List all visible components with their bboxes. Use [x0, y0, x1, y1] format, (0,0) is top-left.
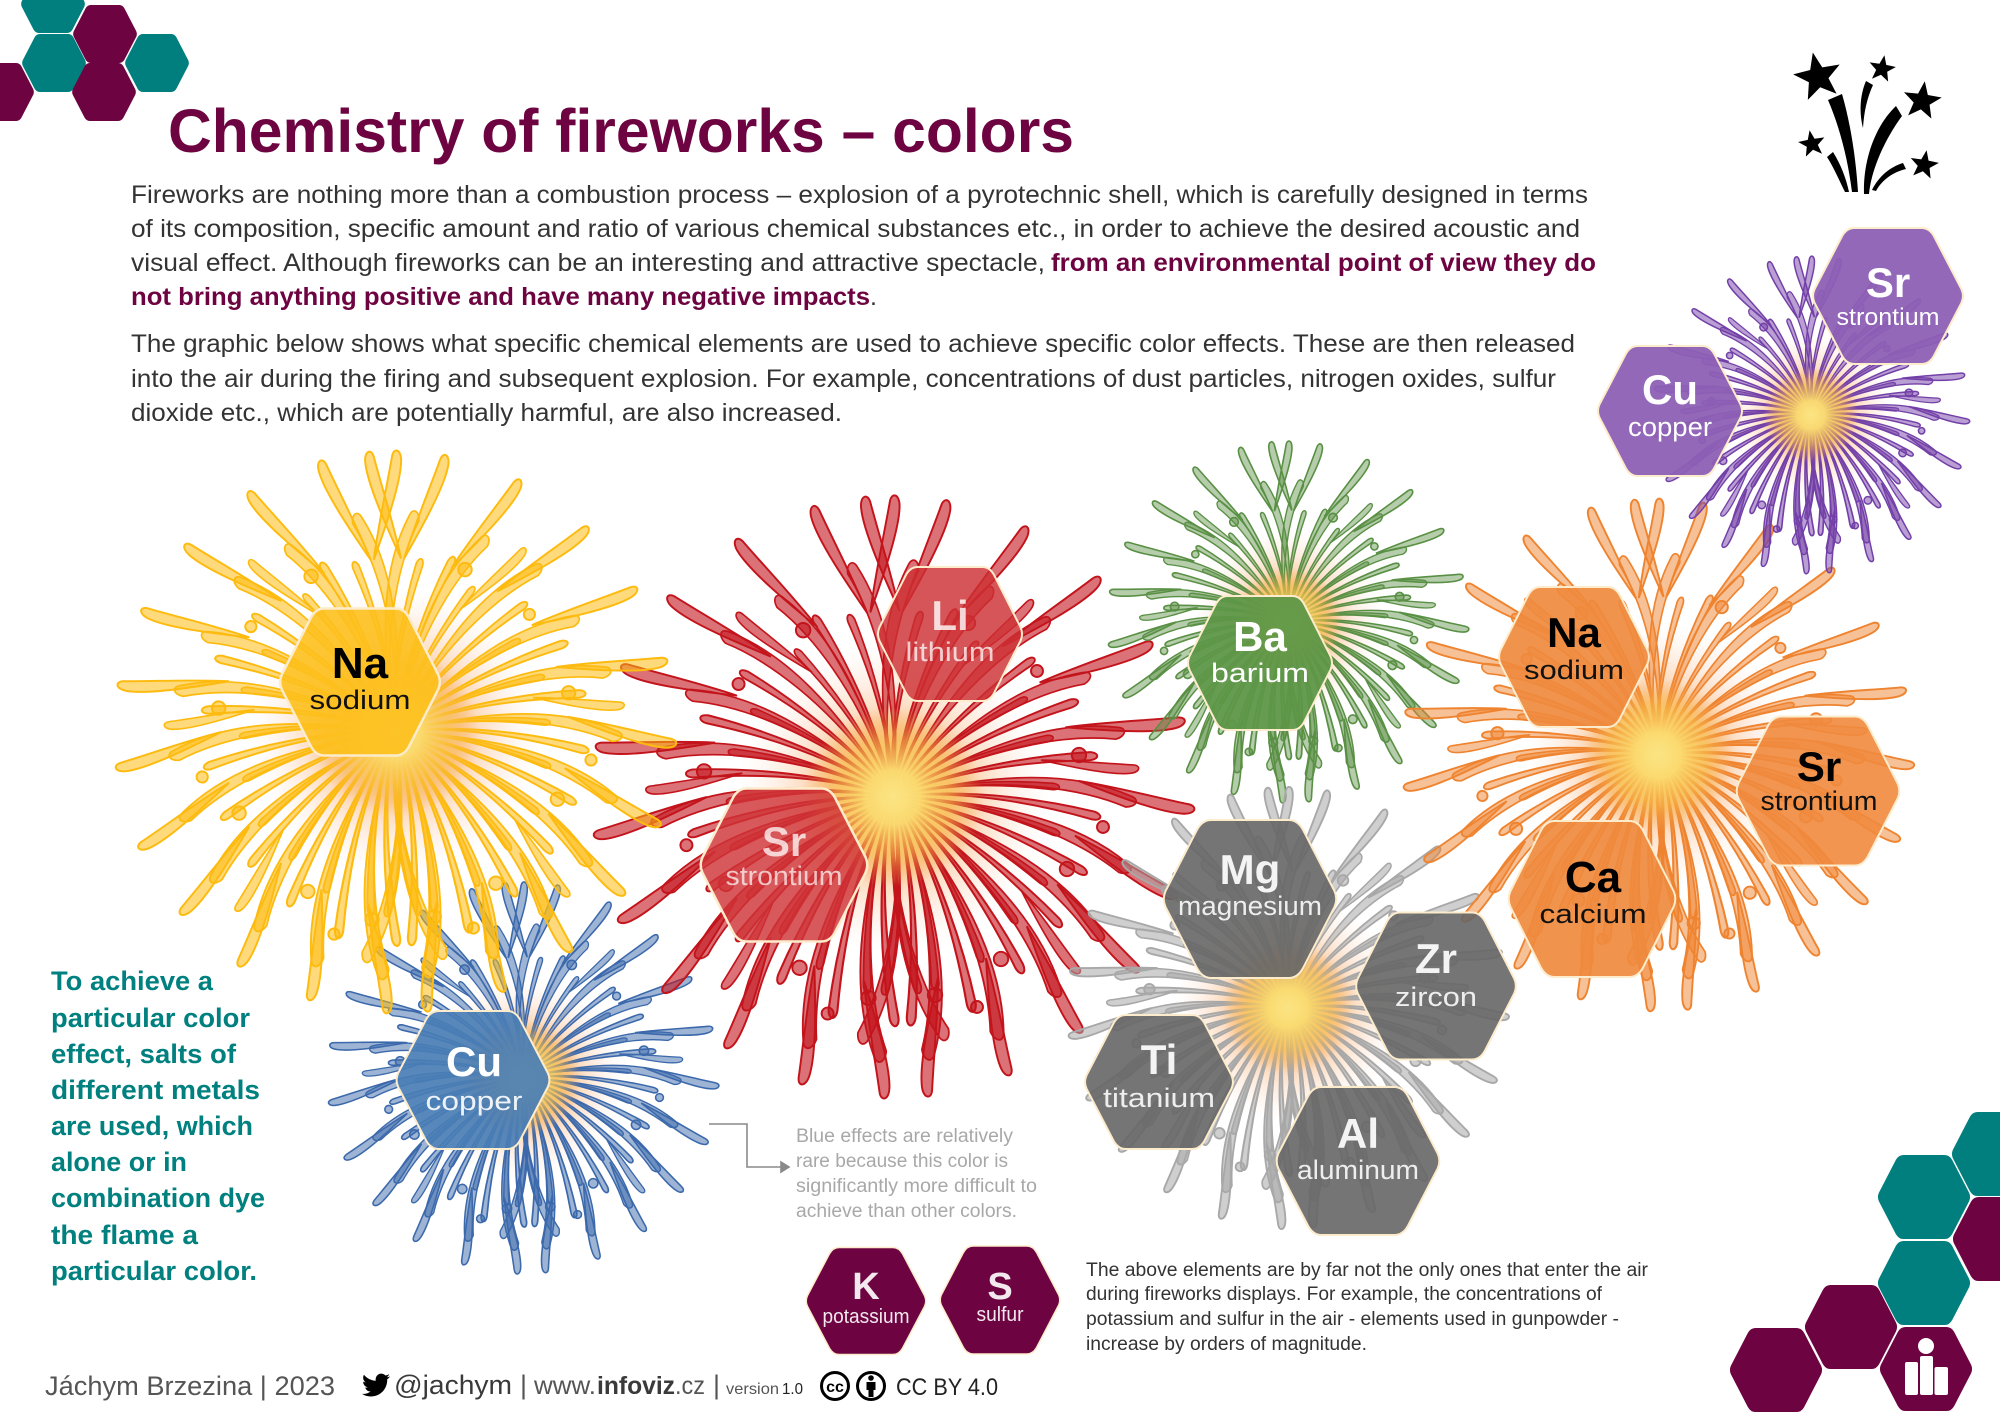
note: other elements: during fireworks displays. For example, the concentrations of [1086, 1284, 1603, 1305]
element: Na sodium (yellow): sodium [310, 685, 410, 715]
element: K potassium: potassium [822, 1306, 910, 1328]
element: Cu copper (purple) [1598, 346, 1742, 476]
element: Na sodium (orange) [1499, 587, 1649, 727]
element: Cu copper (blue): Cu [446, 1038, 502, 1085]
element: Cu copper (blue) [397, 1011, 549, 1149]
note: blue effects: Blue effects are relatively [796, 1126, 1013, 1147]
note: other elements: increase by orders of magnitude. [1086, 1334, 1367, 1355]
footer: @jachym [394, 1370, 512, 1400]
icon: fireworks [1790, 48, 1944, 194]
icon: infoviz logo [1905, 1338, 1948, 1395]
decorative hexagons: bottom right [1730, 1112, 2000, 1412]
element: Cu copper (blue): copper [426, 1086, 523, 1116]
footer: 1.0 [782, 1381, 803, 1398]
intro text block: The graphic below shows what specific chemical elements are used to achieve specific color effects. These are then released [131, 330, 1575, 358]
firework: gray [1048, 783, 1509, 1247]
footer: version [726, 1381, 779, 1398]
element: Sr strontium (orange) [1737, 716, 1899, 866]
element: Sr strontium (purple): Sr [1866, 259, 1910, 306]
element: Sr strontium (purple): strontium [1836, 304, 1940, 331]
element: Al aluminum (gray): Al [1337, 1110, 1379, 1157]
element: K potassium: K [852, 1266, 880, 1308]
element: Sr strontium (purple) [1813, 228, 1963, 364]
intro text block: from an environmental point of view they do [1051, 249, 1596, 277]
intro text block [131, 181, 1596, 427]
note: other elements: potassium and sulfur in the air - elements used in gunpowder - [1086, 1309, 1619, 1330]
element: Sr strontium (orange): Sr [1797, 743, 1841, 790]
side note: teal: combination dye [51, 1183, 265, 1213]
intro text block: visual effect. Although fireworks can be an interesting and attractive spectacle, [131, 249, 1045, 277]
element: K potassium [806, 1248, 926, 1354]
note: other elements: The above elements are by far not the only ones that enter the air [1086, 1260, 1649, 1281]
element: Ti titanium (gray): titanium [1103, 1083, 1215, 1113]
element: Li lithium (red): lithium [906, 637, 994, 667]
side note: teal [51, 966, 265, 1286]
firework: yellow [90, 446, 677, 1036]
element: Na sodium (orange): sodium [1524, 655, 1624, 685]
element: Na sodium (yellow): Na [332, 639, 389, 688]
footer: | [713, 1370, 720, 1400]
firework: green [1092, 438, 1469, 817]
element: Zr zircon (gray): Zr [1415, 935, 1457, 982]
footer: | [520, 1370, 527, 1400]
note: blue effects [796, 1126, 1037, 1222]
element: Mg magnesium (gray): magnesium [1178, 891, 1322, 921]
side note: teal: are used, which [51, 1111, 253, 1141]
element: Cu copper (purple): Cu [1642, 366, 1698, 413]
firework: blue [310, 879, 719, 1290]
side note: teal: To achieve a [51, 966, 214, 996]
element: Sr strontium (red): Sr [762, 818, 806, 865]
element: Al aluminum (gray) [1277, 1087, 1439, 1235]
element: Al aluminum (gray): aluminum [1297, 1155, 1419, 1185]
element: Ti titanium (gray) [1085, 1015, 1233, 1149]
decorative hexagons: top left [0, 0, 189, 121]
element: Ba barium (green): Ba [1233, 613, 1287, 660]
side note: teal: effect, salts of [51, 1039, 237, 1069]
footer: .cz [675, 1372, 705, 1400]
footer: CC BY 4.0 [896, 1374, 998, 1401]
intro text block: dioxide etc., which are potentially harmful, are also increased. [131, 399, 842, 427]
element: Na sodium (orange): Na [1547, 609, 1601, 656]
element: S sulfur [940, 1246, 1060, 1354]
side note: teal: particular color. [51, 1256, 257, 1286]
element: Ca calcium (orange): calcium [1540, 899, 1646, 929]
side note: teal: the flame a [51, 1220, 199, 1250]
firework: purple [1639, 254, 1970, 587]
footer: cc [826, 1379, 844, 1396]
element: Sr strontium (orange): strontium [1760, 786, 1878, 816]
arrow: to blue note [709, 1124, 789, 1172]
element: Sr strontium (red) [701, 788, 867, 942]
element: Sr strontium (red): strontium [726, 861, 842, 891]
note: other elements [1086, 1260, 1649, 1355]
footer: infoviz [597, 1372, 675, 1400]
firework: red [566, 491, 1195, 1123]
title: Chemistry of fireworks – colors [168, 97, 1074, 165]
intro text block: of its composition, specific amount and ratio of various chemical substances etc., in order to achieve the desired acoustic and [131, 215, 1580, 243]
element: Cu copper (purple): copper [1628, 412, 1712, 442]
element: Ti titanium (gray): Ti [1141, 1036, 1177, 1083]
footer [45, 1370, 998, 1401]
footer: Jáchym Brzezina | 2023 [45, 1371, 335, 1401]
footer: www. [533, 1372, 596, 1400]
element: Zr zircon (gray): zircon [1395, 982, 1477, 1012]
element: Li lithium (red) [878, 567, 1022, 701]
note: blue effects: rare because this color is [796, 1151, 1008, 1172]
note: blue effects: significantly more difficult to [796, 1176, 1037, 1197]
firework: orange [1380, 495, 1915, 1032]
element: Na sodium (yellow) [280, 608, 440, 756]
element: Ba barium (green): barium [1211, 658, 1309, 688]
element: S sulfur: sulfur [976, 1304, 1024, 1326]
side note: teal: particular color [51, 1003, 250, 1033]
element: Zr zircon (gray) [1356, 912, 1516, 1060]
element: Ca calcium (orange) [1509, 821, 1675, 977]
intro text block: not bring anything positive and have many negative impacts [131, 283, 870, 311]
side note: teal: different metals [51, 1075, 260, 1105]
element: Li lithium (red): Li [931, 592, 969, 639]
element: Mg magnesium (gray) [1164, 820, 1336, 978]
intro text block: into the air during the firing and subsequent explosion. For example, concentrations of dust particles, nitrogen oxides, sulfur [131, 365, 1556, 393]
side note: teal: alone or in [51, 1147, 187, 1177]
element: S sulfur: S [987, 1266, 1013, 1308]
element: Ca calcium (orange): Ca [1565, 853, 1622, 902]
note: blue effects: achieve than other colors. [796, 1201, 1017, 1222]
element: Ba barium (green) [1188, 596, 1332, 730]
intro text block: . [870, 283, 877, 311]
element: Mg magnesium (gray): Mg [1220, 846, 1280, 893]
intro text block: Fireworks are nothing more than a combustion process – explosion of a pyrotechnic shell, which is carefully designed in terms [131, 181, 1588, 209]
